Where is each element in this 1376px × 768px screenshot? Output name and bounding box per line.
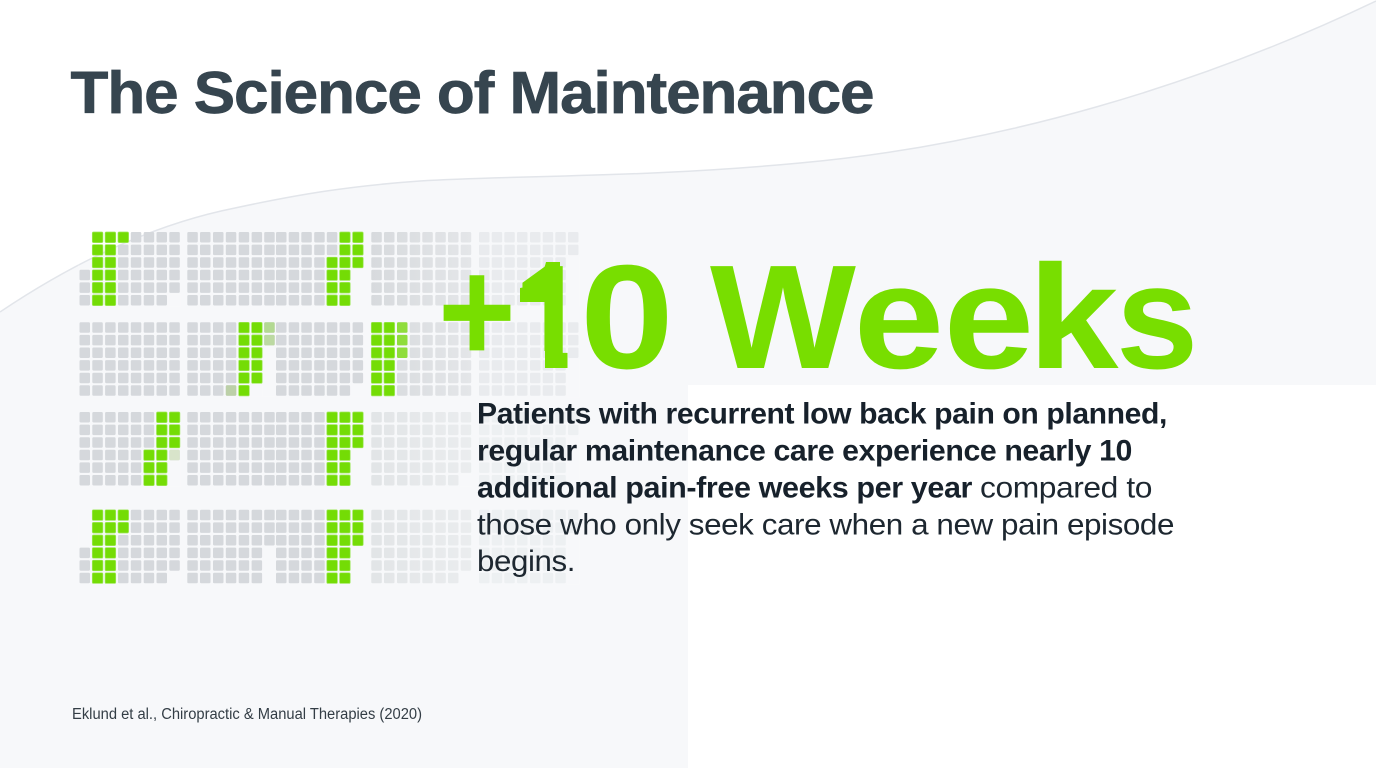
green weeks: row 3 left [144,412,180,486]
green weeks: row 1 left [92,232,129,306]
green weeks: row 3 right [327,412,363,486]
headline stat: +10 Weeks: W [710,235,856,400]
green weeks: row 2 right [371,322,408,396]
description text block: begins. [477,545,575,578]
headline stat: +10 Weeks [444,260,1192,370]
headline stat: +10 Weeks: 0 [580,234,674,400]
description text block: Patients with recurrent low back pain on planned, [477,398,1167,430]
green weeks: row 4 right [327,510,363,583]
headline stat: +10 Weeks: s [1116,235,1198,400]
green weeks: row 4 left [92,510,129,583]
description text block [477,398,1174,578]
title: The Science of Maintenance [70,60,874,126]
source citation: Eklund et al., Chiropractic & Manual Therapies (2020) [72,706,422,723]
headline stat: +10 Weeks: +1 [438,229,587,400]
description text block: those who only seek care when a new pain episode [477,508,1174,542]
description text block: compared to [980,472,1152,504]
description text block: regular maintenance care experience nearly 10 [477,434,1132,468]
calendar waffle chart: weeks of the year [80,232,578,584]
green weeks: row 1 right [327,232,363,306]
green weeks: row 2 middle [226,322,275,396]
headline stat: +10 Weeks: eek [854,234,1119,399]
description text block: additional pain-free weeks per year [477,472,973,504]
